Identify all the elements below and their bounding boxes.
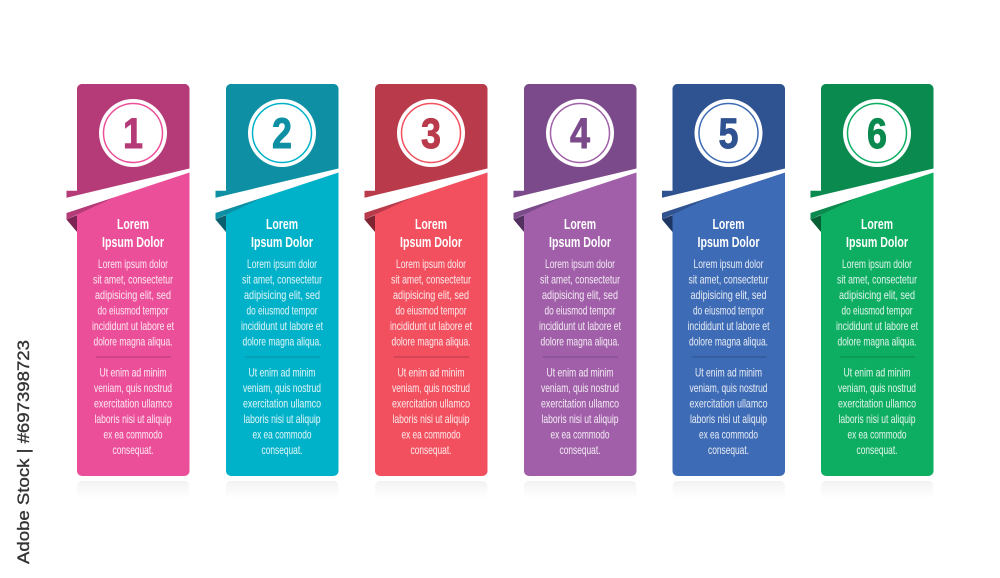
card 3 first paragraph [390,257,472,348]
card 4 first paragraph: dolore magna aliqua. [540,334,620,348]
card 4 second paragraph: Ut enim ad minim [546,366,614,380]
card 5 second paragraph: Ut enim ad minim [695,366,762,380]
card 5 heading: Lorem [712,216,744,233]
card 5 first paragraph: Lorem ipsum dolor [694,257,764,271]
card 6 second paragraph: ex ea commodo [848,428,907,442]
card 1 second paragraph: Ut enim ad minim [100,366,167,380]
card 2 first paragraph: do eiusmod tempor [246,304,318,318]
card 4 first paragraph: sit amet, consectetur [540,272,620,286]
card 1 reflection [77,481,190,501]
card 3 second paragraph: ex ea commodo [402,428,461,442]
card 6 first paragraph: dolore magna aliqua. [838,334,916,348]
card 4 body [524,84,636,476]
card 5 number badge: 5 [718,110,738,158]
card 6 first paragraph [836,257,918,348]
card 6 second paragraph: veniam, quis nostrud [838,381,916,395]
card 5 heading [698,216,760,251]
card 4 first paragraph [539,257,621,348]
card 5 ribbon [662,168,785,232]
card 1 heading: Lorem [117,216,149,233]
card 2 body [226,84,338,476]
card 4 number badge [546,99,614,167]
card 5 second paragraph [690,366,768,457]
card 3 number badge [397,99,465,167]
card 2 header [226,84,338,191]
card 3 second paragraph: consequat. [410,443,452,457]
card 1 ribbon [66,168,190,232]
card 4 heading: Ipsum Dolor [549,234,611,251]
card 5 first paragraph: adipisicing elit, sed [690,288,766,302]
card 4 first paragraph: do eiusmod tempor [544,304,616,318]
card 6 reflection [821,481,934,501]
card 2 first paragraph: Lorem ipsum dolor [247,257,317,271]
card 4 reflection [524,481,636,501]
card 3 second paragraph: laboris nisi ut aliquip [392,412,470,426]
card 1 heading [102,216,164,251]
card 2 number badge [248,99,316,167]
card 6 first paragraph: do eiusmod tempor [842,304,912,318]
card 1 first paragraph [92,257,174,348]
side credit text: Adobe Stock | #697398723 [14,340,33,564]
card 3 reflection [375,481,488,501]
card 2 first paragraph: dolore magna aliqua. [242,334,322,348]
panel: step 4 [514,84,636,501]
card 2 second paragraph: Ut enim ad minim [248,366,316,380]
card 4 ribbon [514,168,636,232]
card 6 second paragraph: Ut enim ad minim [844,366,911,380]
card 1 first paragraph: dolore magna aliqua. [94,334,172,348]
card 3 heading: Ipsum Dolor [400,234,462,251]
card 2 heading: Lorem [266,216,298,233]
card 5 first paragraph: dolore magna aliqua. [689,334,768,348]
card 2 second paragraph: consequat. [262,443,302,457]
card 2 first paragraph: incididunt ut labore et [241,319,323,333]
card 2 number badge: 2 [272,110,292,158]
card 6 first paragraph: Lorem ipsum dolor [842,257,912,271]
card 3 second paragraph: Ut enim ad minim [398,366,465,380]
panel: step 3 [364,84,488,501]
card 3 header [375,84,488,191]
card 3 first paragraph: adipisicing elit, sed [393,288,469,302]
card 2 reflection [226,481,338,501]
card 5 second paragraph: exercitation ullamco [690,396,768,410]
panel: step 6 [810,84,934,501]
card 1 number badge: 1 [123,110,143,158]
card 1 second paragraph: laboris nisi ut aliquip [94,412,172,426]
card 6 first paragraph: sit amet, consectetur [837,272,917,286]
card 5 header [672,84,785,191]
card 3 first paragraph: dolore magna aliqua. [392,334,470,348]
card 4 second paragraph [541,366,619,457]
card 6 first paragraph: adipisicing elit, sed [839,288,915,302]
card 1 second paragraph [94,366,172,457]
card 5 body [672,84,785,476]
card 1 second paragraph: veniam, quis nostrud [94,381,172,395]
card 1 first paragraph: incididunt ut labore et [92,319,174,333]
card 4 heading [549,216,611,251]
card 1 first paragraph: do eiusmod tempor [98,304,168,318]
card 6 heading: Ipsum Dolor [846,234,908,251]
card 3 second paragraph [392,366,470,457]
card 6 number badge: 6 [867,110,887,158]
card 6 second paragraph: exercitation ullamco [838,396,916,410]
card 6 header [821,84,934,191]
panel: step 5 [662,84,785,501]
card 2 ribbon [216,168,338,232]
panel: step 1 [66,84,190,501]
card 5 first paragraph: sit amet, consectetur [688,272,768,286]
card 6 second paragraph: laboris nisi ut aliquip [838,412,916,426]
card 1 number badge [99,99,167,167]
card 1 heading: Ipsum Dolor [102,234,164,251]
card 5 second paragraph: consequat. [708,443,749,457]
card 5 second paragraph: laboris nisi ut aliquip [690,412,767,426]
card 3 ribbon [364,168,488,232]
card 2 second paragraph: laboris nisi ut aliquip [244,412,321,426]
card 5 heading: Ipsum Dolor [698,234,760,251]
card 2 second paragraph [243,366,321,457]
card 6 ribbon [810,168,934,232]
card 1 first paragraph: sit amet, consectetur [93,272,173,286]
card 1 body [77,84,190,476]
card 4 first paragraph: adipisicing elit, sed [542,288,618,302]
card 5 first paragraph: incididunt ut labore et [688,319,770,333]
card 1 second paragraph: exercitation ullamco [94,396,172,410]
card 6 second paragraph: consequat. [856,443,898,457]
card 1 second paragraph: consequat. [112,443,154,457]
card 3 second paragraph: exercitation ullamco [392,396,470,410]
card 2 second paragraph: ex ea commodo [252,428,312,442]
card 4 second paragraph: veniam, quis nostrud [541,381,619,395]
card 3 first paragraph: do eiusmod tempor [396,304,466,318]
card 5 first paragraph: do eiusmod tempor [693,304,764,318]
card 4 second paragraph: laboris nisi ut aliquip [542,412,619,426]
card 4 heading: Lorem [564,216,596,233]
card 2 first paragraph: adipisicing elit, sed [244,288,320,302]
card 3 first paragraph: Lorem ipsum dolor [396,257,466,271]
card 4 first paragraph: Lorem ipsum dolor [545,257,615,271]
card 5 number badge [694,99,762,167]
card 3 heading [400,216,462,251]
card 6 second paragraph [838,366,916,457]
card 4 second paragraph: ex ea commodo [550,428,610,442]
card 2 heading: Ipsum Dolor [251,234,313,251]
card 4 header [524,84,636,191]
card 4 first paragraph: incididunt ut labore et [539,319,621,333]
card 3 number badge: 3 [421,110,441,158]
card 3 first paragraph: incididunt ut labore et [390,319,472,333]
card 3 first paragraph: sit amet, consectetur [391,272,471,286]
card 2 heading [251,216,313,251]
card 5 reflection [672,481,785,501]
card 1 header [77,84,190,191]
card 3 body [375,84,488,476]
card 4 second paragraph: exercitation ullamco [541,396,619,410]
card 6 heading: Lorem [861,216,893,233]
card 3 second paragraph: veniam, quis nostrud [392,381,470,395]
panel: step 2 [216,84,338,501]
card 6 first paragraph: incididunt ut labore et [836,319,918,333]
card 4 second paragraph: consequat. [560,443,600,457]
card 4 number badge: 4 [570,110,590,158]
card 2 first paragraph: sit amet, consectetur [242,272,322,286]
card 5 second paragraph: ex ea commodo [699,428,758,442]
card 1 second paragraph: ex ea commodo [104,428,163,442]
card 1 first paragraph: adipisicing elit, sed [95,288,171,302]
card 5 first paragraph [688,257,770,348]
card 6 heading [846,216,908,251]
card 1 first paragraph: Lorem ipsum dolor [98,257,168,271]
card 2 first paragraph [241,257,323,348]
card 3 heading: Lorem [415,216,447,233]
card 2 second paragraph: exercitation ullamco [243,396,321,410]
card 6 number badge [843,99,911,167]
card 5 second paragraph: veniam, quis nostrud [690,381,768,395]
card 6 body [821,84,934,476]
card 2 second paragraph: veniam, quis nostrud [243,381,321,395]
